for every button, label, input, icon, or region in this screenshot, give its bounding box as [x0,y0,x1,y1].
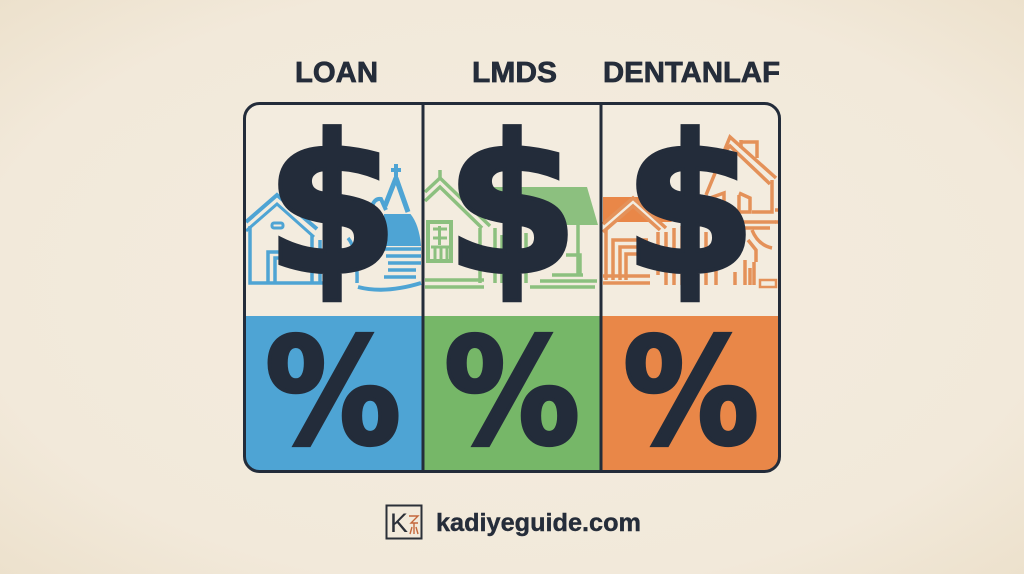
illustration: blue house and church [246,164,421,290]
label: DENTANLAF: DENTANLAF [603,57,780,89]
panel: blue percent block [244,316,423,472]
symbols: percent signs [268,332,757,448]
symbols: dollar signs [278,124,746,302]
illustration: green houses [425,170,598,287]
icon: percent sign 1: % [265,307,401,478]
icon: dollar sign 3: $ [623,95,757,318]
text: website: kadiyeguide.com [436,509,641,537]
panel: orange percent block [601,316,780,472]
icon: brand logo [386,506,422,538]
panel: green percent block [423,316,601,472]
column dividers [423,103,601,472]
icon: dollar sign 1: $ [265,95,399,318]
label: LOAN: LOAN [295,57,378,89]
icon: dollar sign 2: $ [445,95,579,318]
icon: brand logo: K [390,508,408,538]
icon: percent sign 2: % [444,307,580,478]
label: LMDS: LMDS [472,57,557,89]
heading: column labels [295,57,780,89]
icon: percent sign 3: % [623,307,759,478]
panel: three-column card [244,95,780,478]
illustration: orange houses and tree [603,137,779,287]
footer: brand logo and site name [386,506,641,538]
